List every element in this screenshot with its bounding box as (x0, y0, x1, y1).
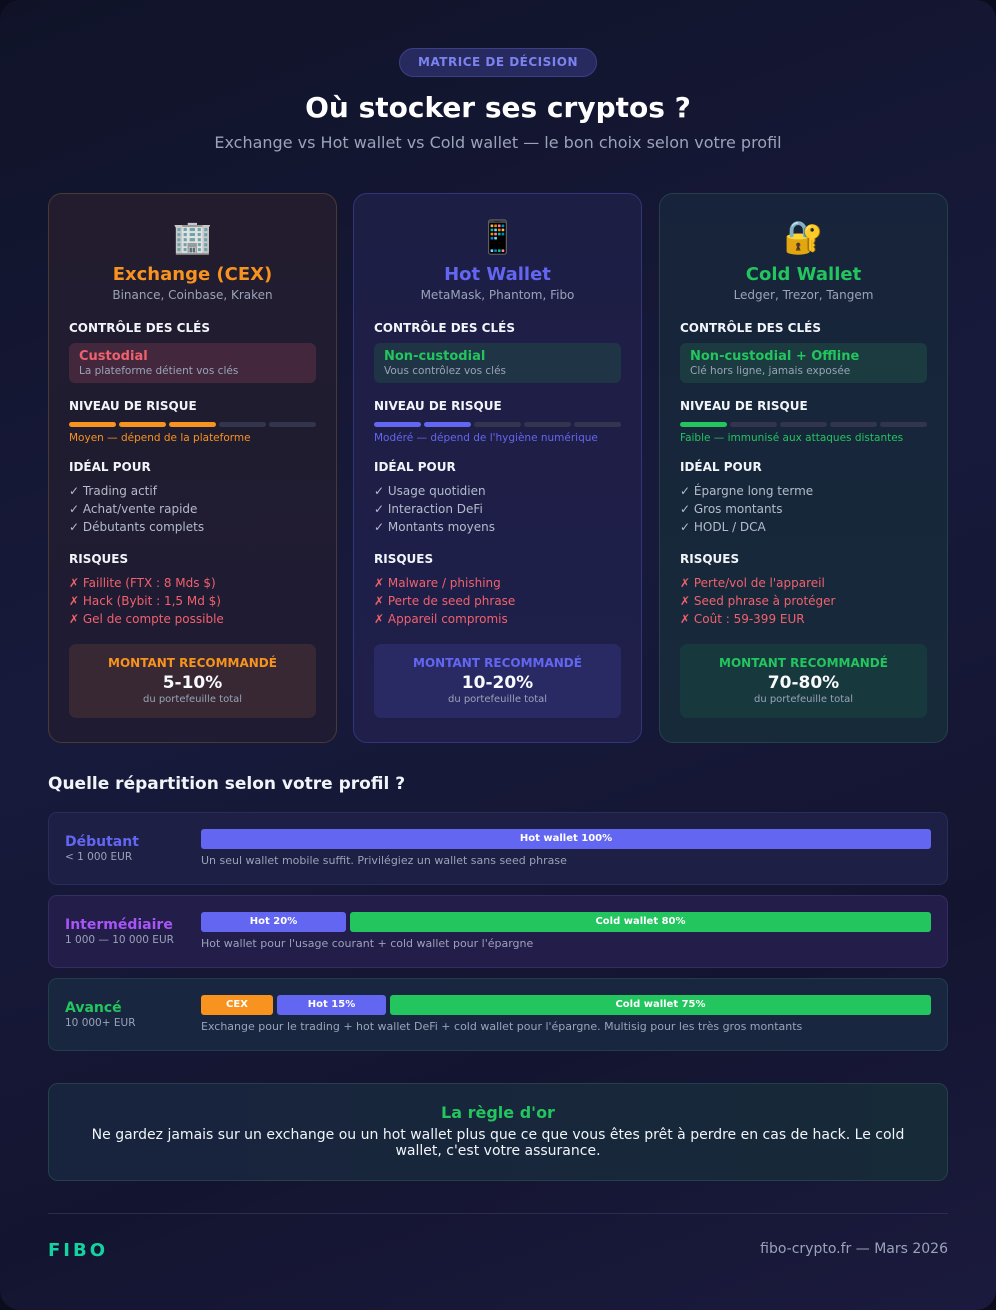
footer source: fibo-crypto.fr — Mars 2026 (760, 1241, 948, 1257)
badge (399, 48, 597, 77)
ideal list: ✓ Interaction DeFi (374, 502, 483, 516)
bar: Cold wallet 80% (595, 916, 686, 927)
panel: exchange: RISQUES (69, 552, 128, 566)
bar: Hot 20% (250, 916, 297, 927)
risk meter (680, 422, 927, 427)
bar: Cold wallet 75% (615, 999, 706, 1010)
risks list: ✗ Gel de compte possible (69, 612, 224, 626)
panel: exchange (48, 193, 337, 743)
risks list: ✗ Appareil compromis (374, 612, 508, 626)
amount box: 70-80% (768, 673, 839, 693)
heading keys: CONTRÔLE DES CLÉS (69, 321, 210, 335)
callout: golden rule: La règle d'or (441, 1103, 555, 1122)
row: avance (48, 978, 948, 1051)
ideal list: ✓ Épargne long terme (680, 484, 813, 498)
ideal list (680, 484, 813, 534)
row: intermediaire: Hot wallet pour l'usage courant + cold wallet pour l'épargne (201, 937, 533, 950)
ideal list: ✓ Usage quotidien (374, 484, 486, 498)
callout: golden rule (48, 1083, 948, 1181)
subtitle: Exchange vs Hot wallet vs Cold wallet — le bon choix selon votre profil (214, 133, 782, 152)
card title: Cold Wallet (746, 264, 861, 285)
amount box: 5-10% (163, 673, 222, 693)
risks list: ✗ Hack (Bybit : 1,5 Md $) (69, 594, 221, 608)
card title: Exchange (CEX) (113, 264, 272, 285)
panel: cold wallet: IDÉAL POUR (680, 460, 762, 474)
ideal list: ✓ Gros montants (680, 502, 783, 516)
row: debutant: Un seul wallet mobile suffit. Privilégiez un wallet sans seed phrase (201, 854, 567, 867)
row: avance: Avancé (65, 1000, 122, 1016)
panel: hot wallet: RISQUES (374, 552, 433, 566)
amount box (69, 644, 316, 718)
ideal list (374, 484, 495, 534)
ideal list: ✓ HODL / DCA (680, 520, 766, 534)
panel: cold wallet: CONTRÔLE DES CLÉS (680, 321, 821, 335)
panel: hot wallet: NIVEAU DE RISQUE (374, 399, 502, 413)
risk meter (69, 422, 316, 427)
risks list (374, 576, 515, 626)
badge: MATRICE DE DÉCISION (418, 55, 578, 69)
key box: Custodial (79, 349, 148, 364)
risks list: ✗ Faillite (FTX : 8 Mds $) (69, 576, 216, 590)
panel: hot wallet: CONTRÔLE DES CLÉS (374, 321, 515, 335)
ideal list: ✓ Débutants complets (69, 520, 204, 534)
key box: Non-custodial (384, 349, 485, 364)
panel: exchange: NIVEAU DE RISQUE (69, 399, 197, 413)
row: intermediaire: 1 000 — 10 000 EUR (65, 934, 174, 946)
amount box: MONTANT RECOMMANDÉ (108, 656, 277, 670)
panel: exchange: Binance, Coinbase, Kraken (112, 288, 273, 302)
icon: phone: 📱 (478, 218, 517, 256)
risks list (69, 576, 224, 626)
panel: cold wallet: RISQUES (680, 552, 739, 566)
bar (201, 829, 931, 849)
row: debutant: Débutant (65, 834, 139, 850)
panel: hot wallet: MetaMask, Phantom, Fibo (421, 288, 574, 302)
amount box: 10-20% (462, 673, 533, 693)
amount box (680, 644, 927, 718)
key box (680, 343, 927, 383)
icon: lock: 🔐 (784, 218, 823, 256)
bar: Hot 15% (308, 999, 355, 1010)
card title: Hot Wallet (444, 264, 551, 285)
ideal list: ✓ Achat/vente rapide (69, 502, 197, 516)
panel: exchange: IDÉAL POUR (69, 460, 151, 474)
amount box: du portefeuille total (448, 694, 547, 705)
ideal list (69, 484, 204, 534)
key box: Non-custodial + Offline (690, 349, 859, 364)
amount box: du portefeuille total (754, 694, 853, 705)
amount box: MONTANT RECOMMANDÉ (413, 656, 582, 670)
ideal list: ✓ Montants moyens (374, 520, 495, 534)
key box: Vous contrôlez vos clés (384, 365, 506, 377)
panel: cold wallet (659, 193, 948, 743)
row: debutant: < 1 000 EUR (65, 851, 132, 863)
risks list: ✗ Coût : 59-399 EUR (680, 612, 805, 626)
risks list: ✗ Seed phrase à protéger (680, 594, 835, 608)
row: avance: 10 000+ EUR (65, 1017, 136, 1029)
amount box: MONTANT RECOMMANDÉ (719, 656, 888, 670)
bar (201, 995, 931, 1015)
panel: cold wallet: NIVEAU DE RISQUE (680, 399, 808, 413)
section heading: Quelle répartition selon votre profil ? (48, 774, 405, 794)
panel: hot wallet (353, 193, 642, 743)
bar (201, 912, 931, 932)
ideal list: ✓ Trading actif (69, 484, 157, 498)
footer logo: FIBO (48, 1240, 108, 1261)
panel: cold wallet: Faible — immunisé aux attaques distantes (680, 432, 903, 444)
risks list: ✗ Malware / phishing (374, 576, 501, 590)
risks list: ✗ Perte de seed phrase (374, 594, 515, 608)
panel: exchange: Moyen — dépend de la plateforme (69, 432, 251, 444)
row: intermediaire: Intermédiaire (65, 917, 173, 933)
risks list: ✗ Perte/vol de l'appareil (680, 576, 825, 590)
row: debutant (48, 812, 948, 885)
amount box: du portefeuille total (143, 694, 242, 705)
panel: hot wallet: Modéré — dépend de l'hygiène numérique (374, 432, 598, 444)
bar: CEX (226, 999, 248, 1010)
panel: cold wallet: Ledger, Trezor, Tangem (734, 288, 873, 302)
risk meter (374, 422, 621, 427)
key box: La plateforme détient vos clés (79, 365, 238, 377)
key box (374, 343, 621, 383)
row: intermediaire (48, 895, 948, 968)
title: Où stocker ses cryptos ? (305, 91, 691, 124)
key box (69, 343, 316, 383)
bar: Hot wallet 100% (520, 833, 612, 844)
row: avance: Exchange pour le trading + hot wallet DeFi + cold wallet pour l'épargne. Multisig pour les très gros montants (201, 1020, 802, 1033)
panel: hot wallet: IDÉAL POUR (374, 460, 456, 474)
callout: golden rule: Ne gardez jamais sur un exchange ou un hot wallet plus que ce que vous êtes prêt à perdre en cas de hack. Le cold wallet, c'est votre assurance. (92, 1127, 904, 1159)
key box: Clé hors ligne, jamais exposée (690, 365, 850, 377)
amount box (374, 644, 621, 718)
risks list (680, 576, 836, 626)
icon: building: 🏢 (173, 218, 212, 256)
